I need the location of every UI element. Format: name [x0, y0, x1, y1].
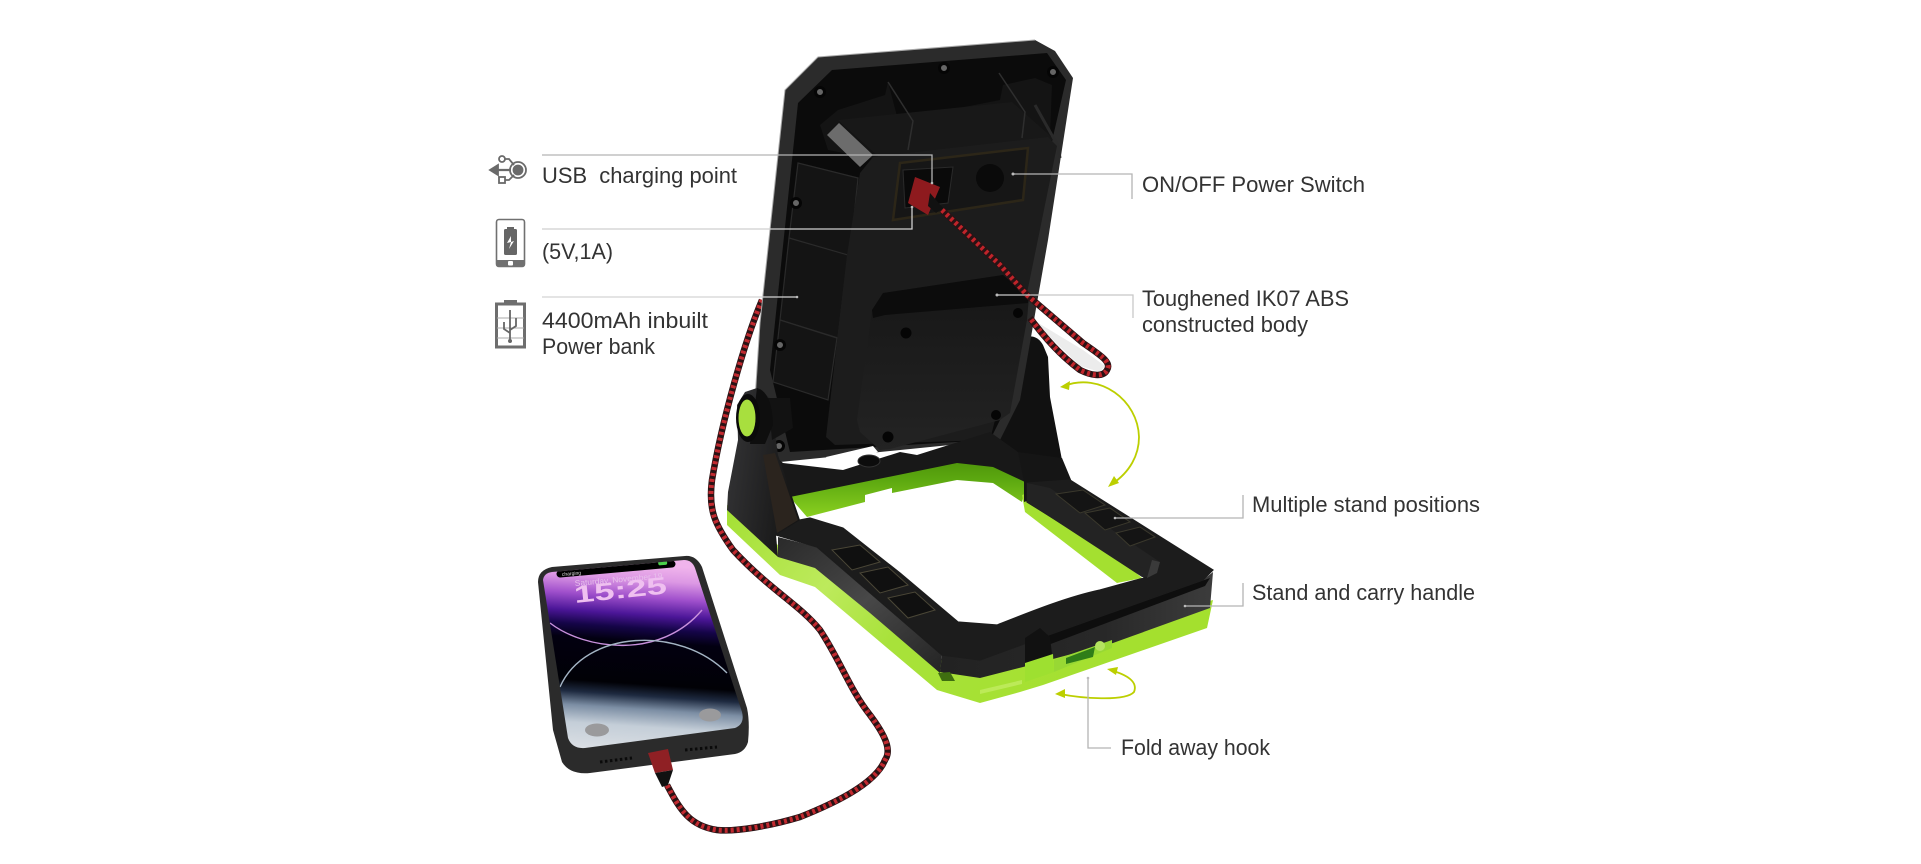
speaker grilles [600, 747, 717, 762]
icon: USB symbol [490, 156, 526, 183]
switch recess [893, 148, 1028, 220]
label: body: constructed body [1142, 312, 1308, 337]
rear plate [826, 137, 1057, 445]
power bank housing [857, 275, 1029, 450]
USB-to-plate cable with loop [942, 210, 1108, 375]
panel outer shell [755, 40, 1073, 462]
phone screen [543, 560, 743, 748]
label: power bank [542, 308, 708, 359]
right foot joint [1018, 452, 1072, 502]
left hinge [727, 388, 800, 557]
icon: phone battery [496, 220, 525, 267]
side channel fins [773, 163, 858, 400]
label: power bank: 4400mAh inbuilt [542, 308, 708, 333]
label: stand positions: Multiple stand positions [1252, 492, 1480, 517]
panel highlight edge [755, 40, 1035, 400]
dynamic island [560, 564, 672, 574]
foam block [827, 123, 873, 167]
clock: 15:25 [573, 572, 668, 609]
leader: stand positions [1114, 495, 1243, 519]
right rail steps [1056, 490, 1155, 546]
icon: power bank battery [496, 300, 524, 347]
leader: USB charging point [542, 155, 933, 184]
battery indicator [658, 562, 668, 566]
label: USB charging point: USB charging point [542, 163, 737, 188]
panel inner recess [770, 53, 1066, 452]
torch button [585, 724, 609, 736]
leader: power switch [1012, 172, 1132, 199]
leader: hook [1087, 677, 1111, 748]
rotation arrow: large [1060, 381, 1139, 487]
green right band [1022, 490, 1142, 583]
camera button [699, 708, 721, 722]
hinge brown strip [763, 453, 798, 533]
rear bar [770, 432, 1032, 500]
label: power bank: Power bank [542, 334, 656, 359]
charging connector [648, 749, 673, 773]
front side [940, 572, 1213, 678]
stand frame [776, 480, 1213, 678]
green base [727, 505, 1213, 703]
leader: carry handle [1184, 583, 1243, 607]
cable: left run to phone [667, 300, 888, 830]
white gap [826, 446, 878, 463]
hinge green cap [736, 394, 760, 442]
date: Saturday, November 19 [574, 571, 663, 588]
green back band [788, 455, 1030, 517]
carrier text: charging [562, 570, 581, 578]
power button [976, 164, 1004, 192]
phone case [538, 556, 749, 773]
label: body: Toughened IK07 ABS [1142, 286, 1349, 311]
rotation arrow: hook [1055, 667, 1135, 698]
leader: body [996, 294, 1133, 318]
mounting disc [858, 455, 880, 467]
front hook [938, 628, 1112, 694]
top face [776, 480, 1213, 660]
top relief [820, 78, 1052, 160]
label: power switch: ON/OFF Power Switch [1142, 172, 1365, 197]
screws [774, 64, 1058, 450]
label: body [1142, 286, 1349, 337]
left rail steps [832, 545, 935, 618]
leader: power bank [542, 296, 798, 298]
label: 5V 1A: (5V,1A) [542, 239, 613, 264]
phone [530, 556, 755, 787]
leader: 5V 1A [542, 206, 913, 229]
rotation panel body [755, 40, 1073, 462]
right hinge arm [980, 336, 1062, 467]
right rail inner face [1027, 483, 1160, 577]
label: hook: Fold away hook [1121, 735, 1271, 760]
USB socket [903, 167, 953, 208]
left rail side [778, 537, 942, 673]
label: carry handle: Stand and carry handle [1252, 580, 1475, 605]
rail end cap [1147, 560, 1160, 578]
hinge knob [768, 398, 793, 440]
cable loop shadow [1030, 318, 1105, 372]
USB plug [908, 177, 940, 215]
